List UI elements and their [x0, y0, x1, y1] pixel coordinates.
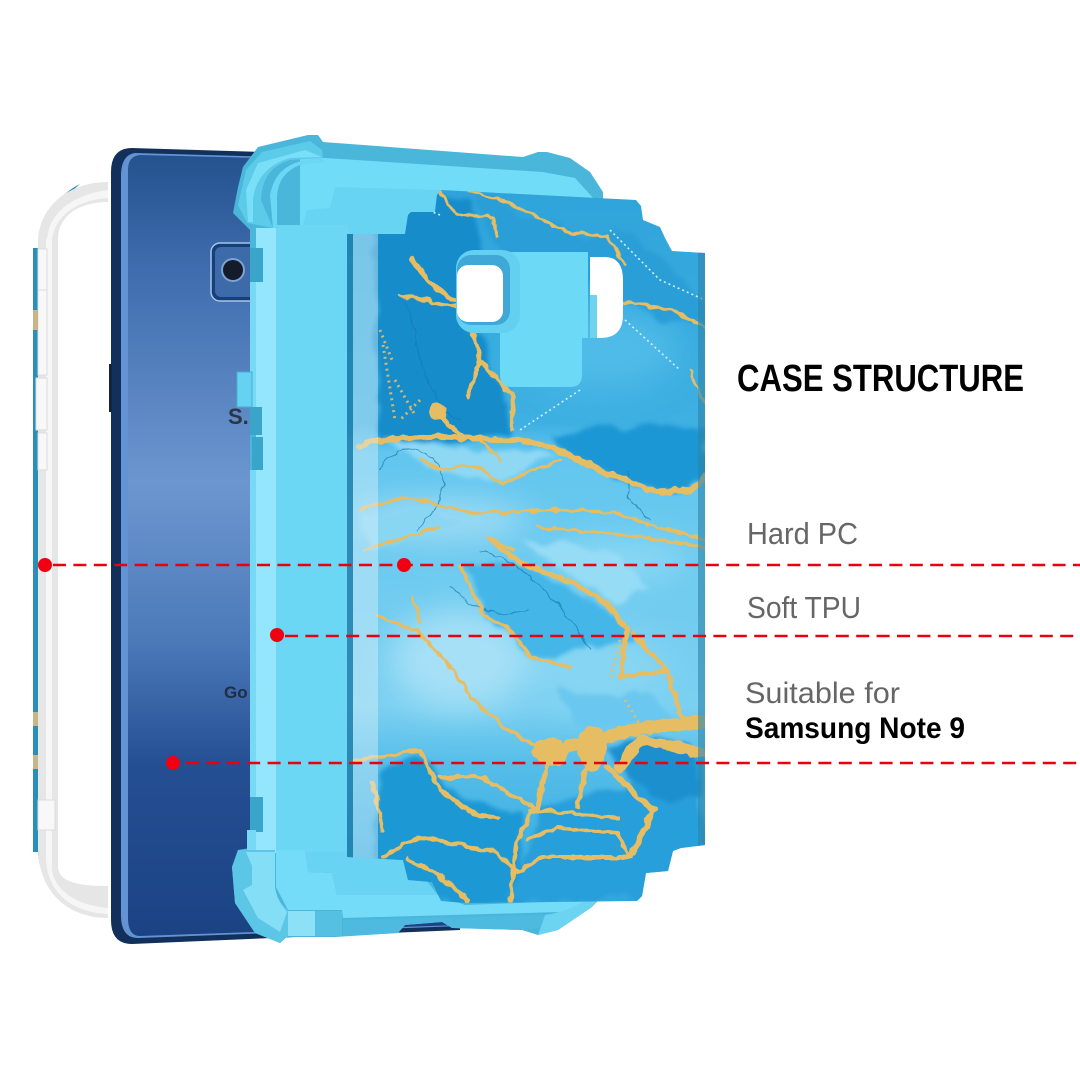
soft colour washes: [350, 310, 690, 710]
label: Suitable for Samsung Note 9: Suitable for: [745, 677, 900, 710]
bottom interior: [276, 850, 600, 918]
left hard shell frame: [33, 182, 108, 918]
model text: Go: [224, 683, 248, 702]
camera cut-out area: [456, 250, 623, 387]
soft TPU frame: [232, 135, 603, 943]
camera hole: [457, 265, 503, 322]
bottom-right corner: [538, 892, 603, 935]
camera collar: [456, 250, 520, 333]
frame silhouette: [232, 135, 603, 943]
camera bevel: [457, 255, 510, 325]
brand text: S.: [228, 404, 249, 429]
side tab: [237, 372, 252, 407]
interior: [276, 225, 348, 865]
callout lines: [53, 565, 1080, 763]
left stripe: [256, 228, 276, 853]
inner TPU panel: [500, 252, 588, 387]
top inset step: [277, 187, 440, 300]
top-left corner: [238, 141, 323, 228]
marble hard PC panel: [340, 185, 710, 910]
top band light: [300, 158, 595, 300]
side notches: [250, 248, 263, 832]
label: Soft TPU: Soft TPU: [747, 590, 861, 625]
label: Hard PC: Hard PC: [747, 516, 858, 551]
gold veins: [350, 190, 705, 903]
marble edge strip: [33, 184, 82, 914]
gold blobs: [428, 403, 607, 770]
fine dark tide lines: [380, 300, 650, 650]
camera module: [211, 243, 261, 301]
right edge strip: [698, 252, 705, 846]
bottom-left corner: [232, 850, 288, 943]
translucent left strip: [353, 190, 378, 870]
title: CASE STRUCTURE: [737, 358, 1024, 400]
infographic canvas: [33, 135, 1080, 944]
phone back: [109, 148, 460, 944]
gold speckle: [380, 330, 640, 725]
label: Suitable for Samsung Note 9: [745, 677, 965, 745]
side button: [109, 364, 112, 412]
bottom band shade: [343, 915, 545, 936]
callout dots: [38, 558, 411, 770]
right cut-out: [590, 257, 623, 338]
label: Suitable for Samsung Note 9: Samsung Note 9: [745, 712, 965, 745]
hard-edged colour washes: [360, 190, 705, 905]
white speckle: [415, 205, 705, 430]
